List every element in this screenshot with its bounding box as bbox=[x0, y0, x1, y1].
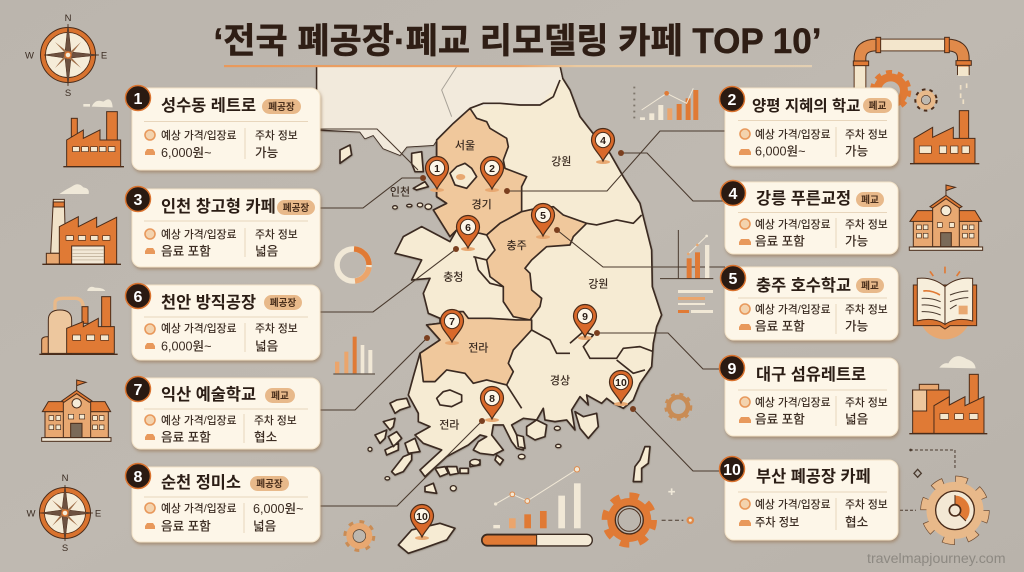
badge 1 bbox=[126, 86, 150, 110]
card 4: 음료 포함 bbox=[755, 234, 805, 248]
icon: factory 6 bbox=[39, 287, 118, 354]
card 4: 가능 bbox=[845, 234, 868, 248]
pin 1: 1 bbox=[434, 163, 440, 175]
card 5: 가능 bbox=[845, 320, 868, 334]
card 3: 음료 포함 bbox=[161, 244, 211, 258]
badge 8 bbox=[126, 464, 150, 488]
card 8: 예상 가격/입장료 bbox=[161, 502, 237, 515]
card 7: 주차 정보 bbox=[254, 414, 297, 427]
badge 5: 5 bbox=[729, 271, 738, 288]
icon: compass top: N bbox=[65, 13, 72, 24]
icon: factory 3 bbox=[42, 184, 121, 264]
region labels: 서울 bbox=[455, 139, 475, 152]
badge 2 bbox=[720, 86, 744, 112]
title: ‘전국 폐공장·폐교 리모델링 카페 TOP 10’ bbox=[214, 22, 821, 61]
badge 4: 4 bbox=[729, 186, 738, 203]
badge 5 bbox=[720, 266, 746, 290]
card 2 bbox=[720, 86, 898, 166]
pin 9 bbox=[574, 304, 596, 340]
region: north bbox=[317, 67, 562, 155]
card 1: 주차 정보 bbox=[255, 129, 298, 142]
card 3: 예상 가격/입장료 bbox=[161, 228, 237, 241]
badge 2: 2 bbox=[728, 92, 737, 109]
icon: book bbox=[913, 267, 977, 339]
badge 3: 3 bbox=[134, 192, 143, 209]
card 6: 주차 정보 bbox=[255, 322, 298, 335]
chart: top mini bars bbox=[634, 87, 698, 120]
region labels: 충청 bbox=[443, 271, 463, 284]
card 2: 6,000원~ bbox=[755, 144, 805, 158]
card 7: 익산 예술학교 bbox=[161, 386, 256, 404]
card 6: 예상 가격/입장료 bbox=[161, 322, 237, 335]
pin 10 Jeju: 10 bbox=[416, 511, 428, 523]
card 10: 예상 가격/입장료 bbox=[755, 498, 831, 511]
card 5: 충주 호수학교 bbox=[756, 277, 851, 295]
card 5: 주차 정보 bbox=[845, 303, 888, 316]
card 4: 예상 가격/입장료 bbox=[755, 218, 831, 231]
card 5: 음료 포함 bbox=[755, 320, 805, 334]
pin 4: 4 bbox=[600, 135, 606, 147]
pin 6: 6 bbox=[465, 222, 471, 234]
pin 4 bbox=[592, 128, 614, 164]
icon: gear bottom right bbox=[900, 449, 986, 541]
card 9: 음료 포함 bbox=[755, 412, 805, 426]
icon: compass top: E bbox=[101, 50, 107, 62]
badge 9 bbox=[720, 356, 744, 380]
region labels bbox=[390, 139, 608, 431]
card 2: 예상 가격/입장료 bbox=[755, 128, 831, 141]
icon: compass top: S bbox=[65, 88, 71, 99]
card 7 bbox=[126, 376, 320, 449]
card 8: 6,000원~ bbox=[253, 502, 303, 516]
card 4 bbox=[720, 180, 898, 254]
icon: compass bottom: N bbox=[62, 473, 69, 484]
card 1: 성수동 레트로 bbox=[161, 97, 256, 115]
pin 10 Busan: 10 bbox=[615, 377, 627, 389]
card 4: 주차 정보 bbox=[845, 218, 888, 231]
card 8: 음료 포함 bbox=[161, 520, 211, 534]
islands bbox=[398, 523, 455, 553]
donut chart bbox=[337, 249, 369, 281]
pin 2: 2 bbox=[489, 163, 495, 175]
pin 10 Jeju bbox=[410, 504, 434, 540]
borders bbox=[470, 80, 653, 408]
card 10: 협소 bbox=[845, 514, 868, 530]
card 2: 가능 bbox=[845, 144, 868, 158]
badge 9: 9 bbox=[728, 361, 737, 378]
chart: left middle bars bbox=[333, 337, 375, 374]
map of Korea bbox=[317, 66, 662, 553]
card 3: 주차 정보 bbox=[255, 228, 298, 241]
icon: compass bottom: S bbox=[62, 543, 68, 554]
pin 5 bbox=[532, 204, 554, 239]
card 2: 주차 정보 bbox=[845, 128, 888, 141]
card 1: 6,000원~ bbox=[161, 146, 211, 160]
icon: factory 9 bbox=[909, 356, 987, 434]
pin 9: 9 bbox=[582, 311, 588, 323]
pin 1 bbox=[426, 156, 448, 192]
icon: compass bottom: E bbox=[95, 508, 101, 520]
card 7: 폐교 bbox=[271, 390, 289, 402]
card 1: 예상 가격/입장료 bbox=[161, 129, 237, 142]
card 2: 폐교 bbox=[869, 100, 886, 112]
icon: pipe bbox=[853, 37, 971, 104]
card 1: 폐공장 bbox=[268, 101, 295, 113]
icon: compass top bbox=[25, 13, 107, 99]
card 9: 예상 가격/입장료 bbox=[755, 396, 831, 409]
card 3: 인천 창고형 카페 bbox=[161, 198, 276, 216]
mainland bbox=[317, 66, 662, 477]
card 5 bbox=[720, 266, 898, 340]
pin 10 Busan bbox=[610, 370, 632, 406]
card 10: 주차 정보 bbox=[845, 498, 888, 511]
card 7: 음료 포함 bbox=[161, 430, 211, 444]
badge 3 bbox=[126, 186, 150, 212]
card 3 bbox=[126, 186, 320, 267]
card 6: 넓음 bbox=[255, 340, 278, 354]
card 3: 넓음 bbox=[255, 244, 278, 258]
card 10 bbox=[720, 456, 898, 540]
region labels: 강원 bbox=[551, 154, 571, 168]
badge 8: 8 bbox=[134, 469, 143, 486]
badge 6: 6 bbox=[134, 289, 143, 306]
icon: school 7 bbox=[42, 380, 111, 441]
card 10: 주차 정보 bbox=[755, 516, 799, 529]
pin 5: 5 bbox=[540, 210, 546, 222]
icon: gears bottom bbox=[345, 394, 693, 550]
connector lines bbox=[320, 129, 725, 506]
pin 8 bbox=[480, 386, 504, 422]
watermark: travelmapjourney.com bbox=[867, 551, 1006, 567]
card 8 bbox=[126, 464, 320, 542]
card 2: 양평 지혜의 학교 bbox=[752, 97, 860, 115]
title rule bbox=[224, 65, 812, 67]
region labels: 경상 bbox=[550, 374, 570, 387]
legend lines bbox=[678, 290, 713, 313]
card 6: 6,000원~ bbox=[161, 340, 211, 354]
pin 7: 7 bbox=[449, 316, 455, 328]
Seoul blob bbox=[450, 163, 477, 188]
region labels: 강원 bbox=[588, 276, 608, 290]
card 7: 예상 가격/입장료 bbox=[161, 414, 237, 427]
card 6 bbox=[126, 284, 320, 360]
region labels: 전라 bbox=[439, 418, 459, 431]
card 8: 순천 정미소 bbox=[161, 474, 241, 492]
region labels: 경기 bbox=[472, 198, 492, 211]
region labels: 충주 bbox=[507, 239, 527, 252]
card 7: 협소 bbox=[254, 430, 277, 444]
icon: compass bottom bbox=[27, 473, 101, 554]
card 6: 폐공장 bbox=[270, 297, 296, 309]
icon: school 4 bbox=[909, 185, 983, 250]
pin 2 bbox=[480, 156, 504, 192]
card 8: 폐공장 bbox=[256, 478, 283, 490]
pin 6 bbox=[456, 216, 480, 251]
card 5: 예상 가격/입장료 bbox=[755, 303, 831, 316]
chart: bottom bars and progress bbox=[482, 467, 592, 546]
chart: right middle bars bbox=[660, 230, 713, 279]
card 10: 부산 폐공장 카페 bbox=[756, 468, 871, 486]
badge 4 bbox=[720, 180, 746, 206]
card 9 bbox=[720, 356, 898, 436]
card 3: 폐공장 bbox=[283, 202, 309, 214]
pin 8: 8 bbox=[489, 393, 495, 405]
badge 6 bbox=[126, 284, 150, 308]
region: Seoul Gyeonggi bbox=[433, 108, 527, 237]
region: Chungju bbox=[487, 207, 587, 320]
card 8: 넓음 bbox=[253, 520, 276, 534]
icon: gears top right bbox=[872, 72, 936, 110]
badge 7: 7 bbox=[134, 382, 143, 399]
icon: factory 1 bbox=[63, 99, 124, 167]
lake bbox=[437, 390, 462, 407]
card 1 bbox=[126, 86, 320, 170]
badge 10: 10 bbox=[723, 462, 741, 479]
card 9: 넓음 bbox=[845, 412, 868, 426]
card 9: 대구 섬유레트로 bbox=[756, 366, 866, 384]
card 5: 폐교 bbox=[861, 280, 879, 292]
icon: compass top: W bbox=[25, 50, 34, 62]
card 9: 주차 정보 bbox=[845, 396, 888, 409]
badge 1: 1 bbox=[134, 91, 143, 108]
badge 10 bbox=[720, 456, 744, 482]
icon: factory 2 bbox=[910, 111, 979, 164]
region: Jeolla north bbox=[420, 312, 532, 385]
card 1: 가능 bbox=[255, 146, 278, 160]
region labels: 전라 bbox=[468, 342, 488, 355]
card 4: 강릉 푸른교정 bbox=[756, 190, 851, 208]
card 4: 폐교 bbox=[861, 194, 879, 206]
pin 7 bbox=[440, 310, 464, 345]
card 6: 천안 방직공장 bbox=[161, 294, 256, 312]
icon: compass bottom: W bbox=[27, 508, 36, 520]
region labels: 인천 bbox=[390, 185, 410, 199]
badge 7 bbox=[126, 376, 150, 402]
